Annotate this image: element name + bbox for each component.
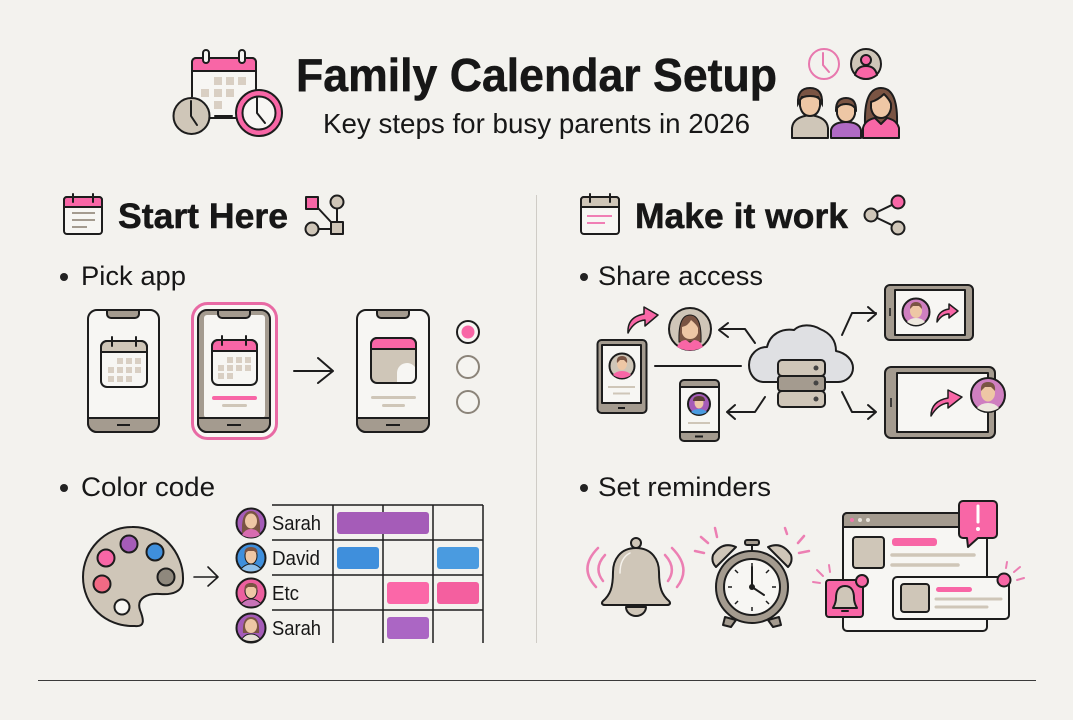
panel: make it work [580, 194, 1024, 631]
arrow: cloud to woman [719, 323, 755, 343]
sharing diagram [598, 285, 1005, 441]
column divider [536, 195, 538, 643]
title: Family Calendar Setup [296, 49, 777, 101]
alert speech bubble [959, 501, 997, 547]
phone: unselected [88, 310, 159, 432]
phone: selected [192, 304, 276, 438]
avatar row: second sarah [236, 614, 266, 642]
browser notification window [813, 501, 1024, 631]
arrow: palette to schedule [194, 567, 218, 586]
pink bell tile [813, 565, 868, 617]
bullet: color code: Color code [81, 472, 215, 502]
bullet: pick app: Pick app [81, 261, 186, 291]
icon: ringing bell [587, 538, 683, 616]
bullet: set reminders: Set reminders [598, 472, 771, 502]
bars: etc [387, 582, 479, 604]
avatar row: david [236, 544, 266, 572]
avatar row: sarah [236, 508, 266, 538]
colour coded schedule [236, 505, 483, 643]
heading: start here: Start Here [118, 197, 288, 236]
bar: second sarah [387, 617, 429, 639]
icon: share [864, 196, 904, 234]
bullet: share access: Share access [598, 261, 763, 291]
arrow: to app preview [294, 358, 333, 383]
avatar: woman [669, 308, 711, 350]
label: david: David [272, 548, 320, 570]
bars: david [337, 547, 479, 569]
notification card [893, 562, 1024, 619]
radio options [457, 321, 479, 413]
cloud with server [749, 325, 853, 407]
icon: calendar with clocks [174, 50, 282, 136]
device: lower tablet [885, 367, 1005, 438]
icon: flow diagram [306, 196, 344, 236]
device: mid phone [680, 380, 719, 441]
panel: start here [60, 194, 483, 643]
heading: make it work: Make it work [635, 197, 849, 236]
arrow: cloud to top tablet [842, 307, 876, 335]
icon: paint palette [83, 527, 183, 626]
phone: app preview [357, 310, 429, 432]
icon: event calendar [581, 194, 619, 234]
arrow: cloud to mid phone [727, 397, 765, 419]
device: left tablet [598, 340, 646, 413]
subtitle: Key steps for busy parents in 2026 [323, 108, 750, 139]
connector [655, 365, 741, 367]
header [174, 49, 899, 139]
icon: note calendar [64, 194, 102, 234]
footer rule [38, 680, 1036, 682]
label: sarah: Sarah [272, 513, 321, 535]
icon: family with clock and profile [792, 49, 899, 138]
arrow: pink share from left tablet [628, 307, 658, 333]
bar: sarah [337, 512, 429, 534]
device: top tablet [885, 285, 973, 340]
arrow: cloud to lower tablet [842, 392, 876, 419]
label: etc: Etc [272, 583, 299, 605]
icon: alarm clock [695, 528, 809, 627]
avatar row: etc [236, 578, 266, 608]
label: second sarah: Sarah [272, 618, 321, 640]
